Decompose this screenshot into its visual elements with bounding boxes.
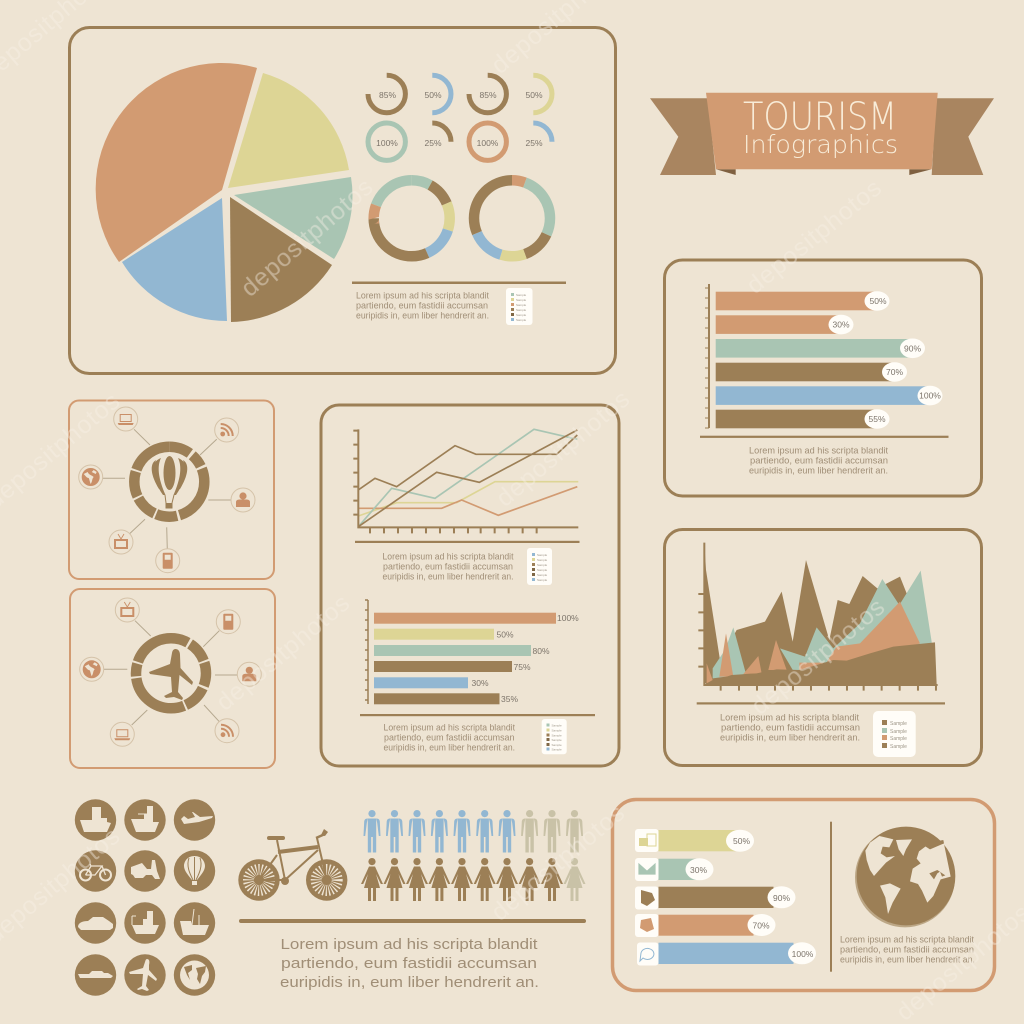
hub ring xyxy=(136,638,206,708)
icon tiles xyxy=(635,829,658,966)
satellite icons xyxy=(80,598,261,746)
legend: Sample xyxy=(890,744,907,750)
legend: Sample xyxy=(537,573,548,577)
value labels: 100% xyxy=(919,391,941,401)
panel: area chart xyxy=(664,530,982,766)
title text: TOURISM xyxy=(743,94,897,138)
value pills xyxy=(686,830,816,964)
text block xyxy=(382,552,514,582)
text block: Lorem ipsum ad his scripta blandit xyxy=(356,290,489,302)
ring percentage labels: 100% xyxy=(477,138,499,148)
connector lines xyxy=(104,621,238,725)
satellite icons xyxy=(79,407,255,573)
legend: Sample xyxy=(552,743,562,747)
icon: bicycle xyxy=(75,850,116,892)
small percentage rings xyxy=(368,75,552,160)
bar chart xyxy=(374,613,556,704)
text block: Lorem ipsum ad his scripta blandit xyxy=(749,446,888,456)
text block: bottom: partiendo, eum fastidii accumsan xyxy=(281,955,537,972)
watermark: depositphotos xyxy=(486,799,630,927)
bar labels: 80% xyxy=(532,646,550,656)
value labels xyxy=(690,836,814,959)
connector lines xyxy=(103,429,232,549)
text block: euripidis in, eum liber hendrerit an. xyxy=(749,466,888,476)
legend: Sample xyxy=(516,303,527,307)
text block: euripidis in, eum liber hendrerit an. xyxy=(840,954,975,966)
bar labels: 50% xyxy=(496,630,514,640)
icon: fishing boat xyxy=(174,902,215,944)
pictogram: men xyxy=(364,810,583,852)
legend: Sample xyxy=(537,558,548,562)
legend xyxy=(873,711,916,757)
text block: Lorem ipsum ad his scripta blandit xyxy=(720,712,859,724)
land detail xyxy=(929,870,945,879)
bar axis xyxy=(705,284,709,428)
icon: cargo ship xyxy=(124,799,166,841)
text block: partiendo, eum fastidii accumsan xyxy=(750,456,888,466)
text block: partiendo, eum fastidii accumsan xyxy=(383,562,513,572)
text block: bottom: Lorem ipsum ad his scripta blandit xyxy=(280,936,538,953)
icon: hot air balloon xyxy=(152,456,187,508)
watermark: depositphotos xyxy=(491,385,635,513)
legend: Sample xyxy=(537,568,548,572)
text block: euripidis in, eum liber hendrerit an. xyxy=(384,742,515,754)
legend xyxy=(527,548,552,585)
value labels: 50% xyxy=(869,296,887,306)
ring percentage labels: 50% xyxy=(424,90,442,100)
legend: Sample xyxy=(537,563,548,567)
icon: scooter xyxy=(124,850,166,892)
bars xyxy=(716,292,930,428)
text block: euripidis in, eum liber hendrerit an. xyxy=(356,310,489,322)
ring percentage labels: 85% xyxy=(479,90,497,100)
bars xyxy=(658,830,794,964)
legend: Sample xyxy=(552,724,562,728)
legend: Sample xyxy=(516,318,527,322)
legend: Sample xyxy=(516,308,527,312)
text block: partiendo, eum fastidii accumsan xyxy=(721,722,860,734)
icon: plane top view xyxy=(124,954,166,996)
value labels: 30% xyxy=(690,865,707,875)
text block: partiendo, eum fastidii accumsan xyxy=(840,944,974,956)
icon: ship xyxy=(75,799,116,841)
panel: pie and donut charts xyxy=(70,28,616,374)
text block xyxy=(356,290,489,322)
large donut right xyxy=(474,180,550,256)
bar labels: 35% xyxy=(501,694,518,704)
ring percentage labels: 25% xyxy=(525,138,543,148)
legend: Sample xyxy=(552,728,562,732)
text block xyxy=(840,934,975,966)
text block: bottom xyxy=(280,936,539,991)
ring percentage labels: 85% xyxy=(379,90,396,100)
text block xyxy=(720,712,860,744)
title ribbon xyxy=(650,93,994,175)
text block xyxy=(384,722,515,754)
legend: Sample xyxy=(890,736,907,742)
transport icon grid xyxy=(75,799,215,996)
bar labels: 100% xyxy=(557,613,579,623)
bar labels: 30% xyxy=(472,678,489,688)
text block: euripidis in, eum liber hendrerit an. xyxy=(382,572,514,582)
frame xyxy=(259,834,327,880)
legend: Sample xyxy=(890,729,907,735)
value labels: 100% xyxy=(792,949,814,959)
text block xyxy=(749,446,888,476)
text block: Lorem ipsum ad his scripta blandit xyxy=(840,934,974,946)
continents xyxy=(865,836,951,914)
text block: partiendo, eum fastidii accumsan xyxy=(384,732,514,744)
value labels: 30% xyxy=(832,320,850,330)
icon: globe xyxy=(174,954,215,996)
ring percentage labels: 50% xyxy=(525,90,543,100)
ring percentage labels: 25% xyxy=(424,138,442,148)
watermark: depositphotos xyxy=(236,173,378,303)
text block: Lorem ipsum ad his scripta blandit xyxy=(384,722,515,734)
wheels xyxy=(238,859,347,901)
legend: Sample xyxy=(552,738,562,742)
value labels: 70% xyxy=(886,367,903,377)
ring percentage labels: 100% xyxy=(376,138,398,148)
icon: tug boat xyxy=(124,902,166,944)
watermark: depositphotos xyxy=(746,593,890,721)
text block: Lorem ipsum ad his scripta blandit xyxy=(382,552,514,562)
hub ring xyxy=(134,447,204,517)
area chart xyxy=(698,543,938,691)
legend: Sample xyxy=(516,298,527,302)
legend: Sample xyxy=(537,553,548,557)
text block: partiendo, eum fastidii accumsan xyxy=(356,300,488,312)
legend: Sample xyxy=(552,734,562,738)
icon: liner xyxy=(75,954,116,996)
watermark: depositphotos xyxy=(211,589,355,717)
icon: bicycle large xyxy=(238,829,347,901)
value labels: 50% xyxy=(733,836,750,846)
panel: plane hub xyxy=(70,589,275,768)
subtitle text: Infographics xyxy=(743,130,898,159)
panel: horizontal bars with pills xyxy=(664,260,982,496)
value labels: 90% xyxy=(904,343,921,353)
satellite glyphs xyxy=(83,602,256,740)
icon: car xyxy=(75,902,116,944)
bar chart axis xyxy=(365,600,368,704)
satellite glyphs xyxy=(82,414,250,569)
legend: Sample xyxy=(890,721,907,727)
icon: balloon xyxy=(174,850,215,892)
legend: Sample xyxy=(552,748,562,752)
value labels: 70% xyxy=(752,920,770,930)
legend: Sample xyxy=(516,313,527,317)
globe xyxy=(855,827,955,927)
bar labels: 75% xyxy=(514,662,531,672)
large donut left xyxy=(374,180,450,256)
panel: communication bars and globe xyxy=(612,800,994,990)
legend: Sample xyxy=(537,578,548,582)
pie chart xyxy=(96,63,352,322)
panel: line chart and bar chart xyxy=(321,405,619,766)
watermark: depositphotos xyxy=(741,174,887,300)
legend xyxy=(542,719,567,754)
bar labels xyxy=(472,613,579,704)
text block: bottom: euripidis in, eum liber hendrerit an. xyxy=(280,974,539,991)
icon: jet plane xyxy=(174,799,215,841)
ring percentage labels xyxy=(376,90,543,148)
value pills xyxy=(828,291,942,429)
text block: euripidis in, eum liber hendrerit an. xyxy=(720,732,860,744)
line chart xyxy=(353,429,578,533)
icon: airplane xyxy=(149,649,193,700)
legend: Sample xyxy=(516,293,527,297)
legend xyxy=(506,288,532,325)
value labels: 55% xyxy=(868,414,886,424)
panel: balloon hub xyxy=(69,400,274,579)
pictogram: women xyxy=(361,858,586,901)
value labels xyxy=(832,296,941,424)
value labels: 90% xyxy=(773,893,790,903)
tile icons xyxy=(638,834,656,961)
